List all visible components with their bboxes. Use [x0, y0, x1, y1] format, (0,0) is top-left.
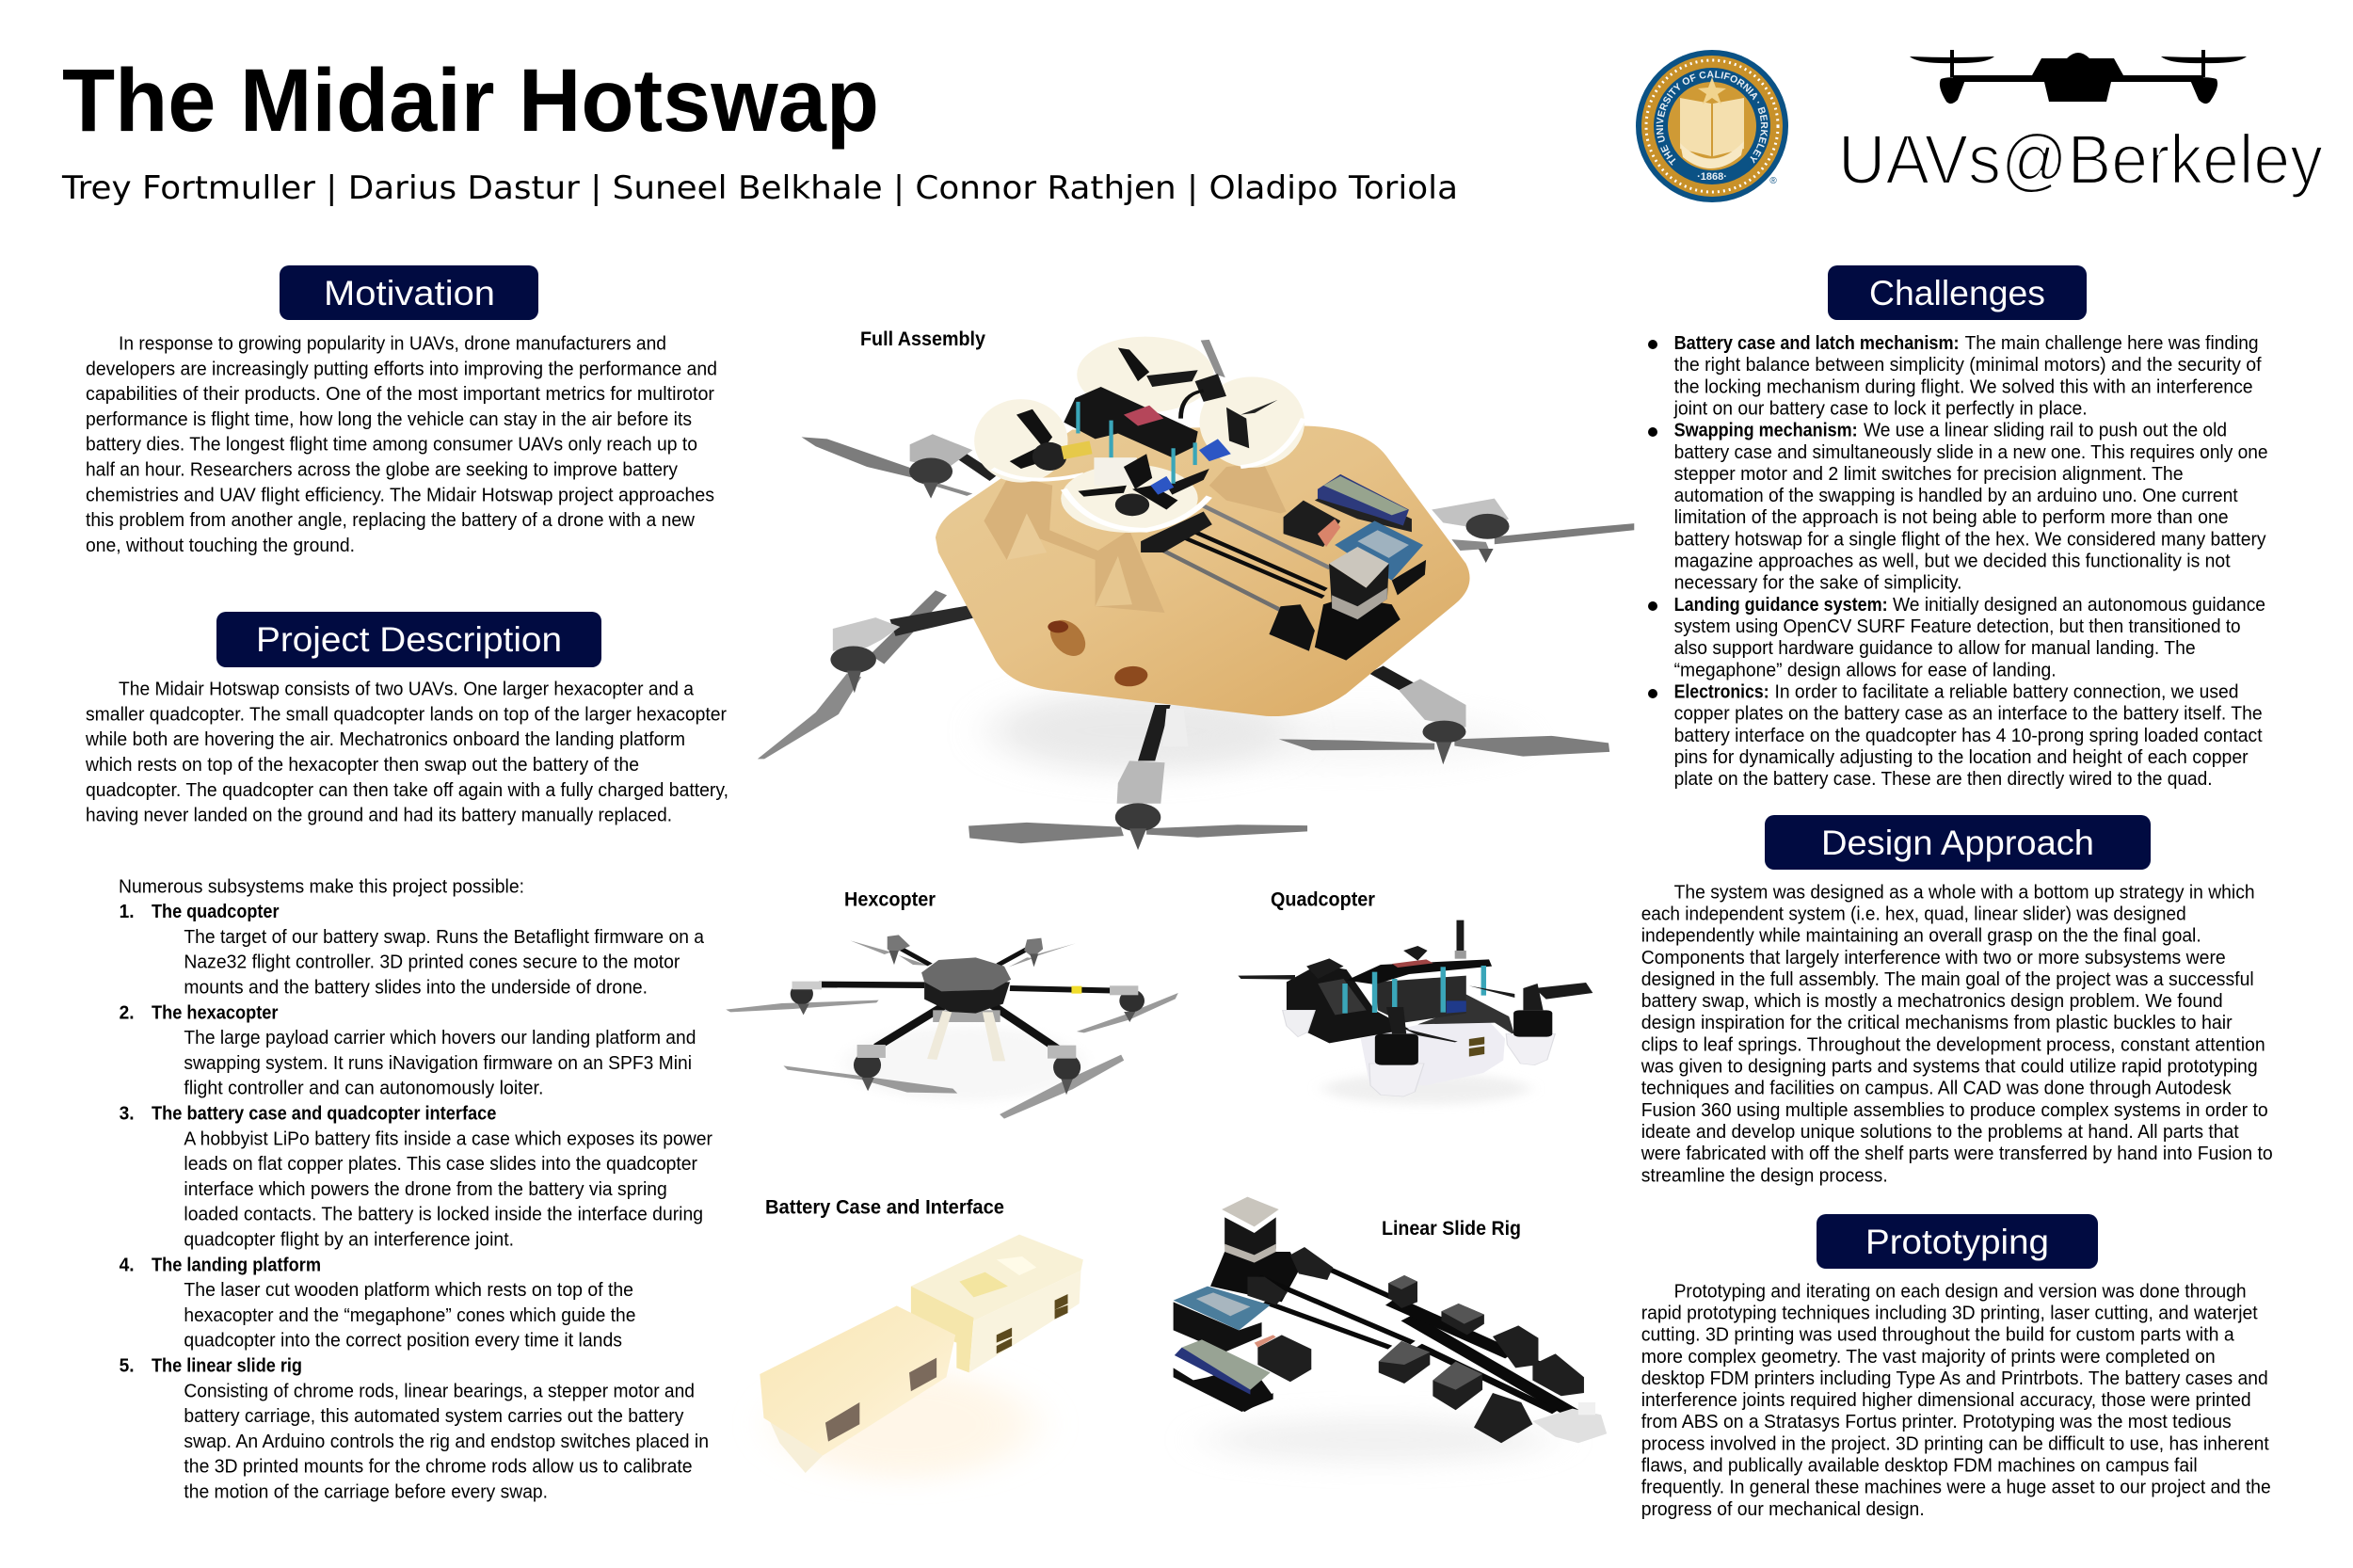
list: landing guidance system: [1648, 594, 2265, 680]
text: design approach body: each independent system (i.e. hex, quad, linear slider) was designed: [1641, 904, 2186, 924]
hub: [921, 957, 1011, 1014]
arm and rotor: lower right: [1279, 666, 1609, 764]
list: landing guidance system: “megaphone” design allows for ease of landing.: [1674, 659, 2057, 680]
motors and cones: [1283, 1010, 1555, 1096]
authors: Trey Fortmuller | Darius Dastur | Suneel Belkhale | Connor Rathjen | Oladipo Toriola: [61, 169, 1458, 207]
list: electronics: Electronics:: [1674, 681, 1769, 702]
caption: full assembly: Full Assembly: [860, 328, 985, 350]
list: swapping mechanism: battery hotswap for a single flight of the hex. We considered many battery: [1674, 528, 2266, 550]
list: subsystem 2 hexacopter: flight controller and can autonomously loiter.: [184, 1078, 543, 1099]
arm and rotor: upper left: [802, 434, 999, 499]
propellers: [726, 940, 1178, 1119]
text: project description body: which rests on top of the hexacopter then swap out the battery of the: [85, 754, 639, 776]
heading: challenges: [1828, 265, 2087, 320]
list: battery case and latch mechanism: joint on our battery case to lock it perfectly in place.: [1673, 397, 2088, 420]
text: prototyping body: progress of our mechanical design.: [1641, 1498, 1925, 1520]
text: prototyping body: interference joints required higher dimensional accuracy, those were printed: [1641, 1389, 2251, 1411]
panel: motivation: [86, 265, 717, 556]
text: design approach body: independently while maintaining an overall grasp on the the final goal.: [1641, 925, 2201, 947]
list: subsystem 2 hexacopter: 2.: [120, 1001, 135, 1023]
text: project description body: smaller quadcopter. The small quadcopter lands on top of the larger hexacopter: [86, 703, 727, 725]
text: prototyping body: more complex geometry. The vast majority of prints were completed on: [1641, 1346, 2216, 1368]
text: motivation body: chemistries and UAV flight efficiency. The Midair Hotswap project approaches: [86, 484, 714, 505]
battery shell: [1361, 1021, 1505, 1085]
logo: UC Berkeley seal: [1636, 50, 1788, 202]
text: design approach body: designed in the full assembly. The main goal of the project was a successful: [1641, 968, 2254, 990]
illustration: full assembly: [758, 337, 1634, 850]
heading: prototyping: [1817, 1214, 2098, 1269]
list: swapping mechanism: limitation of the approach is not being able to perform more than one: [1674, 506, 2229, 528]
text: prototyping body: process involved in the project. 3D printing can be difficult to use, has inherent: [1641, 1432, 2269, 1454]
list: electronics: battery interface on the quadcopter has 4 10-prong spring loaded contact: [1674, 725, 2263, 746]
list: battery case and latch mechanism: the right balance between simplicity (minimal motors) and the security of: [1674, 354, 2262, 376]
list: subsystem 5 linear slide rig: Consisting of chrome rods, linear bearings, a stepper motor and: [184, 1380, 695, 1401]
list: subsystem 1 quadcopter: mounts and the battery slides into the underside of drone.: [184, 977, 648, 998]
logo: UC Berkeley seal: ®: [1769, 176, 1777, 186]
list: swapping mechanism: necessary for the sake of simplicity.: [1674, 572, 1962, 594]
panel: prototyping: [1641, 1214, 2271, 1520]
text: project description body: The Midair Hotswap consists of two UAVs. One larger hexacopter and a: [119, 679, 695, 700]
list: subsystem 2 hexacopter: The large payload carrier which hovers our landing platform and: [184, 1027, 696, 1048]
wood supports: [984, 463, 1287, 613]
heading: project description: [216, 612, 601, 667]
text: prototyping body: flaws, and publically available desktop FDM machines on campus fail: [1641, 1455, 2198, 1476]
list: subsystem 3 battery case: The battery case and quadcopter interface: [152, 1103, 496, 1124]
interface: [911, 1235, 1083, 1372]
arm and rotor: right: [1432, 499, 1634, 563]
motors: [791, 935, 1144, 1095]
text: design approach body: were fabricated with off the shelf parts were transferred by hand into Fusion to: [1641, 1143, 2273, 1164]
text: motivation body: this problem from another angle, replacing the battery of a drone with a new: [86, 509, 695, 531]
list: subsystem 5 linear slide rig: 5.: [120, 1355, 135, 1376]
list: electronics: copper plates on the battery case as an interface to the battery itself. The: [1674, 703, 2263, 725]
text: design approach body: was given to designing parts and systems that could utilize rapid prototyping: [1641, 1056, 2258, 1077]
list: subsystem 3 battery case: loaded contacts. The battery is locked inside the interface during: [184, 1204, 703, 1225]
battery case: [760, 1305, 955, 1473]
text: prototyping body: cutting. 3D printing was used throughout the build for custom parts with a: [1641, 1324, 2234, 1346]
list: subsystem 2 hexacopter: The hexacopter: [152, 1001, 279, 1023]
illustration: quadcopter: [1238, 920, 1593, 1104]
text: subsystems intro: Numerous subsystems make this project possible:: [119, 875, 524, 897]
list: swapping mechanism: magazine approaches as well, but we decided this functionality is not: [1674, 550, 2231, 572]
panel: challenges: [1648, 265, 2268, 790]
quadcopter on platform: [974, 337, 1305, 533]
text: project description body: having never landed on the ground and had its battery manually replaced.: [86, 805, 672, 826]
heading: design approach: Design Approach: [1821, 824, 2094, 862]
text: design approach body: battery swap, which is mostly a mechatronics design problem. We found: [1641, 990, 2223, 1012]
list: electronics: pins for dynamically adjusting to the location and height of each copper: [1674, 746, 2249, 768]
wood knots: [1044, 617, 1153, 690]
list: swapping mechanism: Swapping mechanism:: [1674, 420, 1858, 441]
list: subsystem 3 battery case: A hobbyist LiPo battery fits inside a case which exposes its power: [184, 1128, 712, 1149]
list: landing guidance system: Landing guidance system:: [1674, 594, 1888, 616]
text: design approach body: Components that largely interference with two or more subsystems were: [1641, 947, 2226, 968]
list: subsystem 5 linear slide rig: [120, 1355, 709, 1502]
list: subsystem 5 linear slide rig: the 3D printed mounts for the chrome rods allow us to calibrate: [184, 1456, 693, 1478]
caption: hexcopter: Hexcopter: [844, 888, 936, 911]
text: design approach body: clips to leaf springs. Throughout the development process, constant attention: [1641, 1033, 2265, 1055]
text: design approach body: The system was designed as a whole with a bottom up strategy in which: [1674, 881, 2255, 903]
list: electronics: plate on the battery case. These are then directly wired to the quad.: [1674, 768, 2213, 790]
list: subsystem 4 landing platform: 4.: [120, 1254, 135, 1275]
propellers: [1238, 958, 1593, 1042]
text: project description body: quadcopter. The quadcopter can then take off again with a fully charged battery,: [86, 779, 728, 801]
list: battery case and latch mechanism: Battery case and latch mechanism:: [1674, 332, 1960, 354]
caption: linear slide rig: Linear Slide Rig: [1382, 1217, 1521, 1240]
list: landing guidance system: We initially designed an autonomous guidance: [1893, 594, 2265, 616]
text: prototyping body: Prototyping and iterating on each design and version was done through: [1674, 1280, 2247, 1302]
list: subsystem 1 quadcopter: The quadcopter: [152, 901, 280, 922]
list: battery case and latch mechanism: The main challenge here was finding: [1965, 332, 2259, 354]
arm and rotor: bottom: [968, 705, 1307, 850]
list: subsystem 4 landing platform: hexacopter and the “megaphone” cones which guide the: [184, 1304, 635, 1326]
list: swapping mechanism: [1648, 420, 2268, 594]
logo: UAVs@Berkeley wordmark: UAVs@Berkeley: [1838, 120, 2323, 199]
list: swapping mechanism: stepper motor and 2 limit switches for precision alignment. The: [1674, 463, 2184, 485]
list: subsystem 4 landing platform: The landing platform: [152, 1254, 321, 1275]
caption: quadcopter: Quadcopter: [1271, 888, 1376, 911]
mounts and bearing blocks: [1247, 1247, 1584, 1443]
stepper motor and mount: [1210, 1197, 1299, 1302]
text: design approach body: Fusion 360 using multiple assemblies to produce complex systems in order to: [1641, 1099, 2268, 1121]
landing legs and base: [927, 1010, 1005, 1061]
arm and rotor: left: [758, 590, 975, 759]
heading: design approach: [1765, 815, 2151, 870]
panel: project description: [85, 612, 728, 1502]
text: design approach body: techniques and facilities on campus. All CAD was done through Autodesk: [1641, 1078, 2232, 1099]
list: subsystem 4 landing platform: The laser cut wooden platform which rests on top of the: [184, 1279, 633, 1301]
text: motivation body: [86, 333, 717, 556]
list: subsystem 3 battery case: interface which powers the drone from the battery via spring: [184, 1178, 667, 1200]
list: subsystem 3 battery case: 3.: [120, 1103, 135, 1124]
list: battery case and latch mechanism: [1648, 332, 2262, 420]
heading: prototyping: Prototyping: [1865, 1223, 2049, 1261]
stepper motor and mounts: [1269, 547, 1401, 661]
list: subsystem 1 quadcopter: [120, 901, 705, 998]
illustration: hexcopter: [726, 935, 1178, 1119]
frame and arms: [1287, 920, 1514, 1043]
text: motivation body: battery dies. The longest flight time among consumer UAVs only reach up to: [86, 434, 697, 456]
carriage: [1379, 1275, 1607, 1443]
list: swapping mechanism: automation of the swapping is handled by an arduino uno. One current: [1674, 485, 2238, 506]
list: electronics: In order to facilitate a reliable battery connection, we used: [1775, 681, 2238, 702]
text: motivation body: developers are increasingly putting efforts into improving the performance and: [86, 358, 717, 379]
text: motivation body: In response to growing popularity in UAVs, drone manufacturers and: [119, 333, 666, 354]
text: design approach body: ideate and develop unique solutions to the problems at hand. All parts that: [1641, 1121, 2239, 1143]
shadow: [993, 690, 1289, 772]
list: subsystem 4 landing platform: [120, 1254, 635, 1352]
list: subsystem 1 quadcopter: The target of our battery swap. Runs the Betaflight firmware on a: [184, 926, 705, 948]
list: battery case and latch mechanism: the locking mechanism during flight. We solved this with an interference: [1674, 376, 2253, 397]
text: prototyping body: frequently. In general these machines were a huge asset to our project and the: [1641, 1477, 2271, 1498]
text: prototyping body: [1641, 1280, 2271, 1520]
power box: [1255, 1335, 1311, 1382]
list: subsystem 3 battery case: [120, 1103, 712, 1250]
landing platform: [936, 426, 1470, 716]
list: subsystem 5 linear slide rig: The linear slide rig: [152, 1355, 302, 1376]
text: motivation body: performance is flight time, how long the vehicle can stay in the air before its: [86, 408, 692, 430]
list: subsystem 5 linear slide rig: swap. An Arduino controls the rig and endstop switches placed in: [184, 1431, 709, 1452]
panel: design approach: [1641, 815, 2273, 1186]
text: motivation body: half an hour. Researchers across the globe are seeking to improve battery: [86, 459, 679, 480]
text: design approach body: [1641, 881, 2273, 1186]
text: project description body: while both are hovering the air. Mechatronics onboard the landing platform: [85, 728, 685, 750]
list: subsystem 5 linear slide rig: the motion of the carriage before every swap.: [184, 1481, 548, 1502]
text: design approach body: design inspiration for the critical mechanisms from plastic buckles to hair: [1641, 1012, 2233, 1033]
logo: drone silhouette: [1910, 50, 2247, 104]
list: subsystem 2 hexacopter: swapping system. It runs iNavigation firmware on an SPF3 Mini: [184, 1052, 692, 1074]
rods: [1259, 1258, 1578, 1416]
caption: battery case and interface: Battery Case and Interface: [765, 1195, 1004, 1218]
list: subsystem 1 quadcopter: 1.: [120, 901, 135, 922]
list: landing guidance system: also support hardware guidance to allow for manual landing. The: [1674, 637, 2196, 659]
list: subsystem 2 hexacopter: [120, 1001, 696, 1099]
linear slide rails: [1141, 506, 1330, 610]
list: landing guidance system: system using OpenCV SURF Feature detection, but then transitioned to: [1674, 616, 2241, 637]
arms: [819, 946, 1118, 1049]
list: subsystem 3 battery case: quadcopter flight by an interference joint.: [184, 1229, 514, 1250]
text: project description body: [85, 679, 728, 826]
text: motivation body: one, without touching the ground.: [86, 535, 355, 556]
title: The Midair Hotswap: [62, 51, 879, 151]
arduino: [1174, 1287, 1271, 1352]
heading: motivation: Motivation: [324, 274, 495, 312]
list: subsystem 1 quadcopter: Naze32 flight controller. 3D printed cones secure to the motor: [184, 952, 680, 973]
text: design approach body: streamline the design process.: [1641, 1164, 1888, 1186]
list: electronics: [1648, 681, 2263, 790]
logo: UC Berkeley seal: ·1868·: [1697, 171, 1727, 183]
illustration: linear slide rig: [1174, 1197, 1607, 1462]
list: subsystem 5 linear slide rig: battery carriage, this automated system carries out the battery: [184, 1405, 684, 1427]
list: subsystem 4 landing platform: quadcopter into the correct position every time it lands: [184, 1330, 622, 1352]
illustration: battery case and interface: [760, 1235, 1083, 1478]
list: subsystem 3 battery case: leads on flat copper plates. This case slides into the quadcopter: [184, 1153, 697, 1175]
list: swapping mechanism: We use a linear sliding rail to push out the old: [1864, 420, 2227, 441]
heading: motivation: [280, 265, 538, 320]
text: prototyping body: from ABS on a Stratasys Fortus printer. Prototyping was the most tedious: [1641, 1411, 2232, 1432]
battery: [1174, 1339, 1273, 1412]
text: motivation body: capabilities of their products. One of the most important metrics for multirotor: [86, 383, 714, 405]
text: prototyping body: rapid prototyping techniques including 3D printing, laser cutting, and waterjet: [1641, 1303, 2258, 1323]
heading: project description: Project Description: [256, 620, 562, 659]
text: prototyping body: desktop FDM printers including Type As and Printrbots. The battery cases and: [1641, 1368, 2268, 1389]
list: swapping mechanism: battery case and simultaneously slide in a new one. This requires only one: [1674, 441, 2268, 463]
electronics: battery, box, arduino: [1284, 474, 1426, 595]
heading: challenges: Challenges: [1869, 274, 2045, 312]
